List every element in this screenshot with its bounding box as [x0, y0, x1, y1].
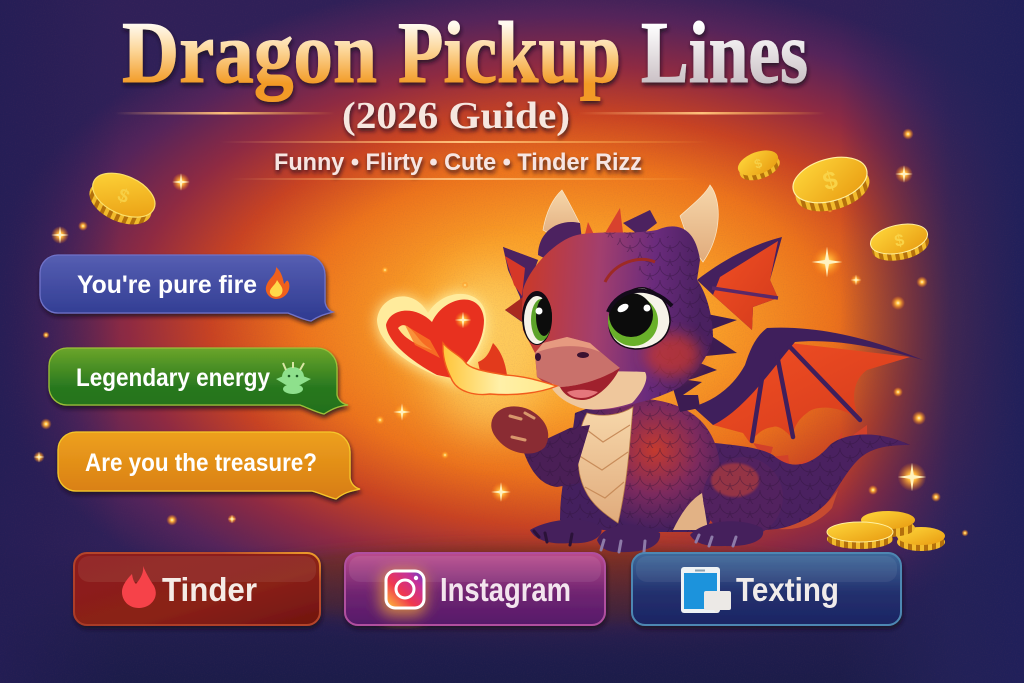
dragon: tail spines: [753, 425, 867, 480]
heart body: [386, 300, 484, 378]
title: Lines: [641, 5, 808, 102]
dragon: cheek blush: [644, 333, 700, 377]
dragon: crest: [568, 208, 623, 290]
bubble: are you the treasure: [58, 432, 360, 499]
dragon: right eye: [608, 288, 672, 349]
coin: large top right: [788, 149, 875, 219]
coin: top left: [83, 164, 162, 233]
dragon: tail: [690, 434, 910, 530]
dragon: head scales: [600, 232, 713, 400]
icon: instagram: [380, 570, 426, 616]
tagline: Funny • Flirty • Cute • Tinder Rizz: [274, 149, 642, 176]
dragon: belly: [578, 407, 633, 523]
sparkles: [34, 128, 968, 536]
dragon: horns: [543, 185, 718, 262]
button: tinder: Tinder: [162, 571, 257, 608]
button: texting: Texting: [736, 571, 839, 608]
title: Dragon: [122, 5, 377, 102]
small flame: [478, 343, 507, 380]
dragon: body: [560, 398, 720, 532]
flame heart: [377, 294, 557, 395]
bubble: legendary energy: [49, 348, 348, 414]
title: Pickup: [398, 5, 621, 102]
dragon: left foot: [530, 520, 602, 545]
dragon: raised arm: [491, 406, 590, 487]
icon: phone and message: [681, 567, 731, 613]
coin: right: [868, 219, 932, 266]
coin: right: $: [893, 230, 906, 251]
flame stream: [443, 343, 557, 395]
dragon: lower belly: [673, 493, 708, 530]
subtitle: (2026 Guide): [342, 95, 570, 137]
heart outline: [377, 294, 486, 378]
button: texting: [632, 553, 901, 625]
coin: large top right: $: [820, 166, 841, 196]
dragon: brow: [605, 259, 655, 282]
bubble: you're pure fire: [40, 255, 333, 321]
button: instagram: Instagram: [440, 571, 571, 608]
icon: tinder flame: [122, 566, 156, 608]
bubble: legendary energy: Legendary energy: [76, 364, 270, 392]
dragon: middle foot: [597, 525, 660, 552]
title: [122, 5, 808, 102]
dragon: left eye: [522, 291, 552, 345]
button: tinder: [74, 553, 320, 625]
dragon: back spines: [672, 313, 737, 412]
icon: fire: [266, 265, 289, 299]
icon: little green dragon: [276, 362, 311, 394]
dragon: right ear: [697, 237, 782, 330]
coin: top left: $: [114, 185, 133, 208]
dragon: rear foot: [690, 521, 763, 546]
dragon: wing: [693, 328, 923, 443]
dragon: [491, 185, 923, 552]
dragon: head bumps: [538, 210, 657, 262]
dragon: haunch: [703, 457, 783, 537]
coin pile: [827, 511, 945, 551]
bubble: are you the treasure: Are you the treasure?: [85, 449, 317, 477]
dragon: snout and jaw: [535, 337, 646, 410]
coin: small top: [735, 145, 783, 185]
dragon: left ear: [503, 247, 538, 322]
heart glow: [377, 294, 486, 385]
button: instagram: [345, 553, 605, 625]
dragon: belly lines: [578, 425, 630, 498]
bubble: you're pure fire: You're pure fire: [77, 271, 257, 299]
dragon: head: [522, 226, 713, 410]
coin: small top: $: [752, 155, 765, 172]
